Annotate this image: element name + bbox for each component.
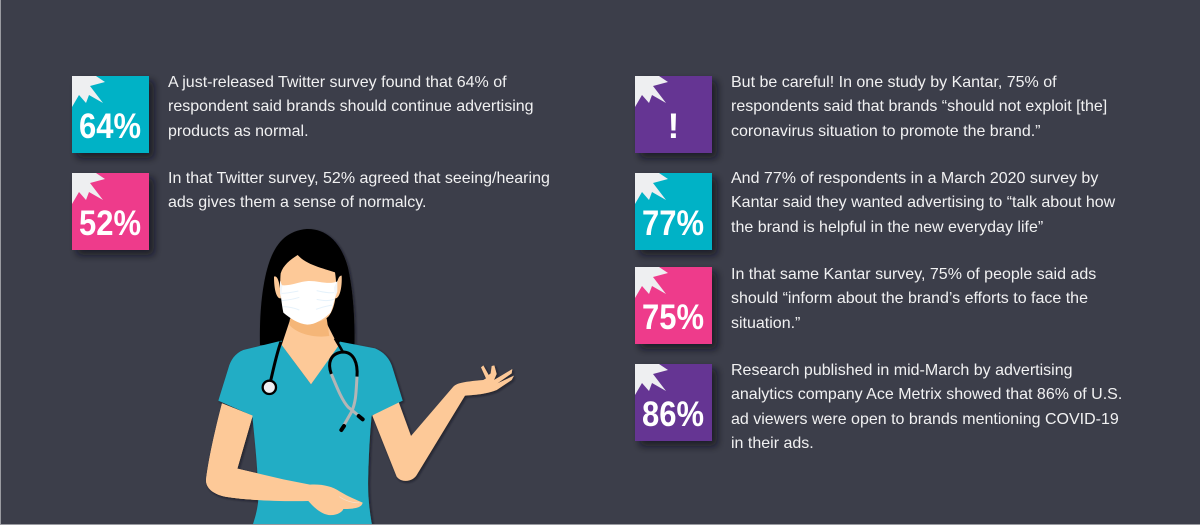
text: Kantar 75% [731, 266, 1096, 332]
text: Ace Metrix 86%: analytics company Ace Metrix showed that 86% of U.S. [731, 386, 1122, 403]
badge: 64%: 64% [79, 107, 141, 146]
text: Kantar warning: But be careful! In one study by Kantar, 75% of [731, 74, 1057, 91]
text: Kantar warning [731, 74, 1107, 140]
text: Kantar 75%: situation.” [731, 315, 800, 332]
ears [274, 276, 342, 298]
text: Ace Metrix 86%: ad viewers were open to brands mentioning COVID-19 [731, 411, 1119, 428]
badge: exclamation [635, 76, 712, 153]
hair [260, 229, 354, 347]
text: Kantar warning: coronavirus situation to promote the brand.” [731, 123, 1040, 140]
text: Ace Metrix 86% [731, 362, 1122, 452]
right arm [372, 365, 514, 481]
badge: 77%: 77% [642, 204, 704, 243]
text: Kantar 77%: the brand is helpful in the new everyday life” [731, 219, 1043, 236]
badge: 75%: 75% [642, 298, 704, 337]
text: Kantar 77%: And 77% of respondents in a March 2020 survey by [731, 170, 1098, 187]
text: Ace Metrix 86%: Research published in mid-March by advertising [731, 362, 1072, 379]
left arm over scrubs [206, 403, 363, 515]
illustration: nurse in mask with stethoscope [206, 229, 514, 525]
badge: 52%: 52% [79, 204, 141, 243]
badge: exclamation: ! [668, 107, 679, 146]
text: Twitter survey 52%: ads gives them a sense of normalcy. [168, 194, 426, 211]
hand detail [339, 497, 359, 503]
neck [282, 320, 338, 384]
text: Twitter survey 64% [168, 74, 534, 140]
neck shadow [289, 318, 329, 337]
text: Twitter survey 64%: products as normal. [168, 123, 309, 140]
mask [280, 281, 337, 325]
stethoscope [263, 338, 363, 430]
badge: 86% [635, 364, 712, 441]
text: Twitter survey 52% [168, 170, 550, 211]
text: Kantar warning: respondents said that brands “should not exploit [the] [731, 98, 1107, 115]
text: Twitter survey 64%: respondent said brands should continue advertising [168, 98, 534, 115]
badge: 86%: 86% [642, 395, 704, 434]
text: Kantar 77%: Kantar said they wanted advertising to “talk about how [731, 194, 1115, 211]
badge: 64% [72, 76, 149, 153]
text: Ace Metrix 86%: in their ads. [731, 435, 814, 452]
badge: 77% [635, 173, 712, 250]
text: Kantar 75%: should “inform about the brand’s efforts to face the [731, 290, 1088, 307]
badge: 75% [635, 267, 712, 344]
text: Kantar 75%: In that same Kantar survey, 75% of people said ads [731, 266, 1096, 283]
left arm shadow shape [206, 403, 363, 515]
badge: 52% [72, 173, 149, 250]
text: Twitter survey 64%: A just-released Twitter survey found that 64% of [168, 74, 507, 91]
text: Kantar 77% [731, 170, 1116, 236]
face [280, 255, 336, 323]
scrubs [218, 341, 403, 525]
text: Twitter survey 52%: In that Twitter survey, 52% agreed that seeing/hearing [168, 170, 550, 187]
